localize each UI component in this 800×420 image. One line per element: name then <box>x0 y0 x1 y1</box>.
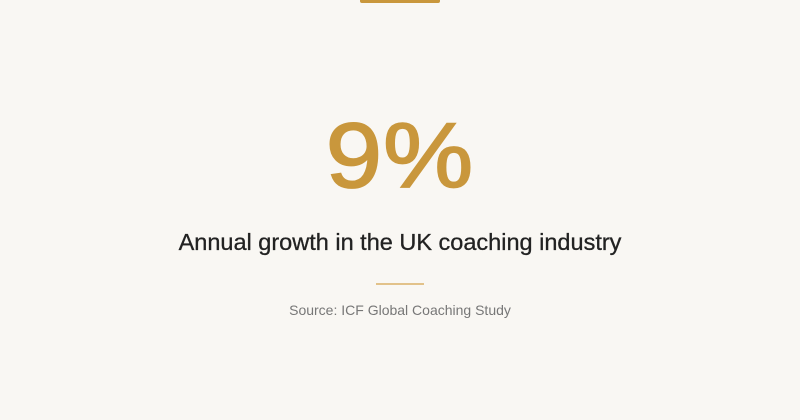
subtitle: Annual growth in the UK coaching industry <box>179 229 621 255</box>
divider <box>376 283 424 285</box>
big stat: 9% <box>326 105 474 207</box>
top accent bar <box>360 0 440 3</box>
source: Source: ICF Global Coaching Study <box>289 302 511 318</box>
